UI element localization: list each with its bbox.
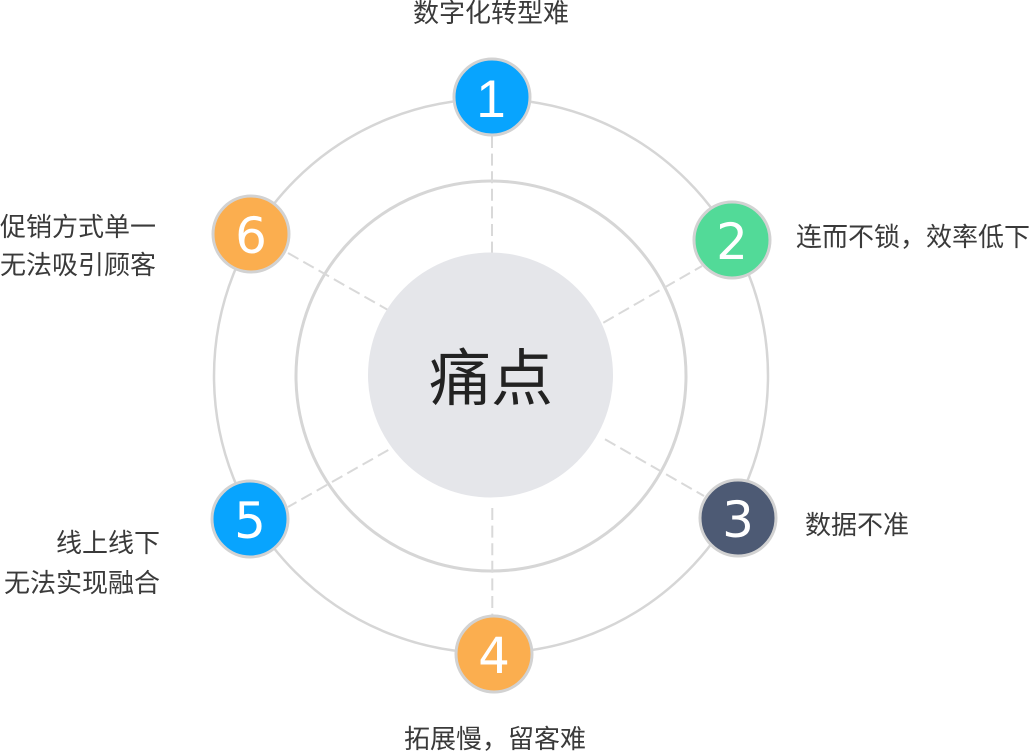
- center circle: 痛点: [429, 345, 553, 414]
- label 6: [0, 212, 156, 280]
- label 5: 无法实现融合: [4, 568, 160, 598]
- node 3: [700, 480, 776, 556]
- node 5: 5: [234, 492, 266, 550]
- outer ring: [214, 99, 768, 653]
- label 3: 数据不准: [805, 510, 909, 540]
- label 6: 无法吸引顾客: [0, 250, 156, 280]
- node 5: [212, 481, 288, 557]
- node 6: 6: [235, 207, 267, 265]
- node 4: 4: [478, 627, 510, 685]
- label 2: 连而不锁，效率低下: [796, 222, 1029, 252]
- node 2: 2: [716, 213, 748, 271]
- node 1: 1: [476, 70, 506, 129]
- label 5: 线上线下: [56, 528, 160, 558]
- inner ring: [296, 181, 686, 571]
- dashed spokes: [288, 136, 704, 616]
- node 3: 3: [722, 491, 754, 549]
- center circle: [368, 252, 613, 498]
- node 4: [456, 616, 532, 692]
- node 1: [454, 59, 530, 135]
- node 6: [213, 196, 289, 272]
- node 2: [694, 202, 770, 278]
- label 5: [4, 528, 160, 598]
- label 6: 促销方式单一: [0, 212, 156, 242]
